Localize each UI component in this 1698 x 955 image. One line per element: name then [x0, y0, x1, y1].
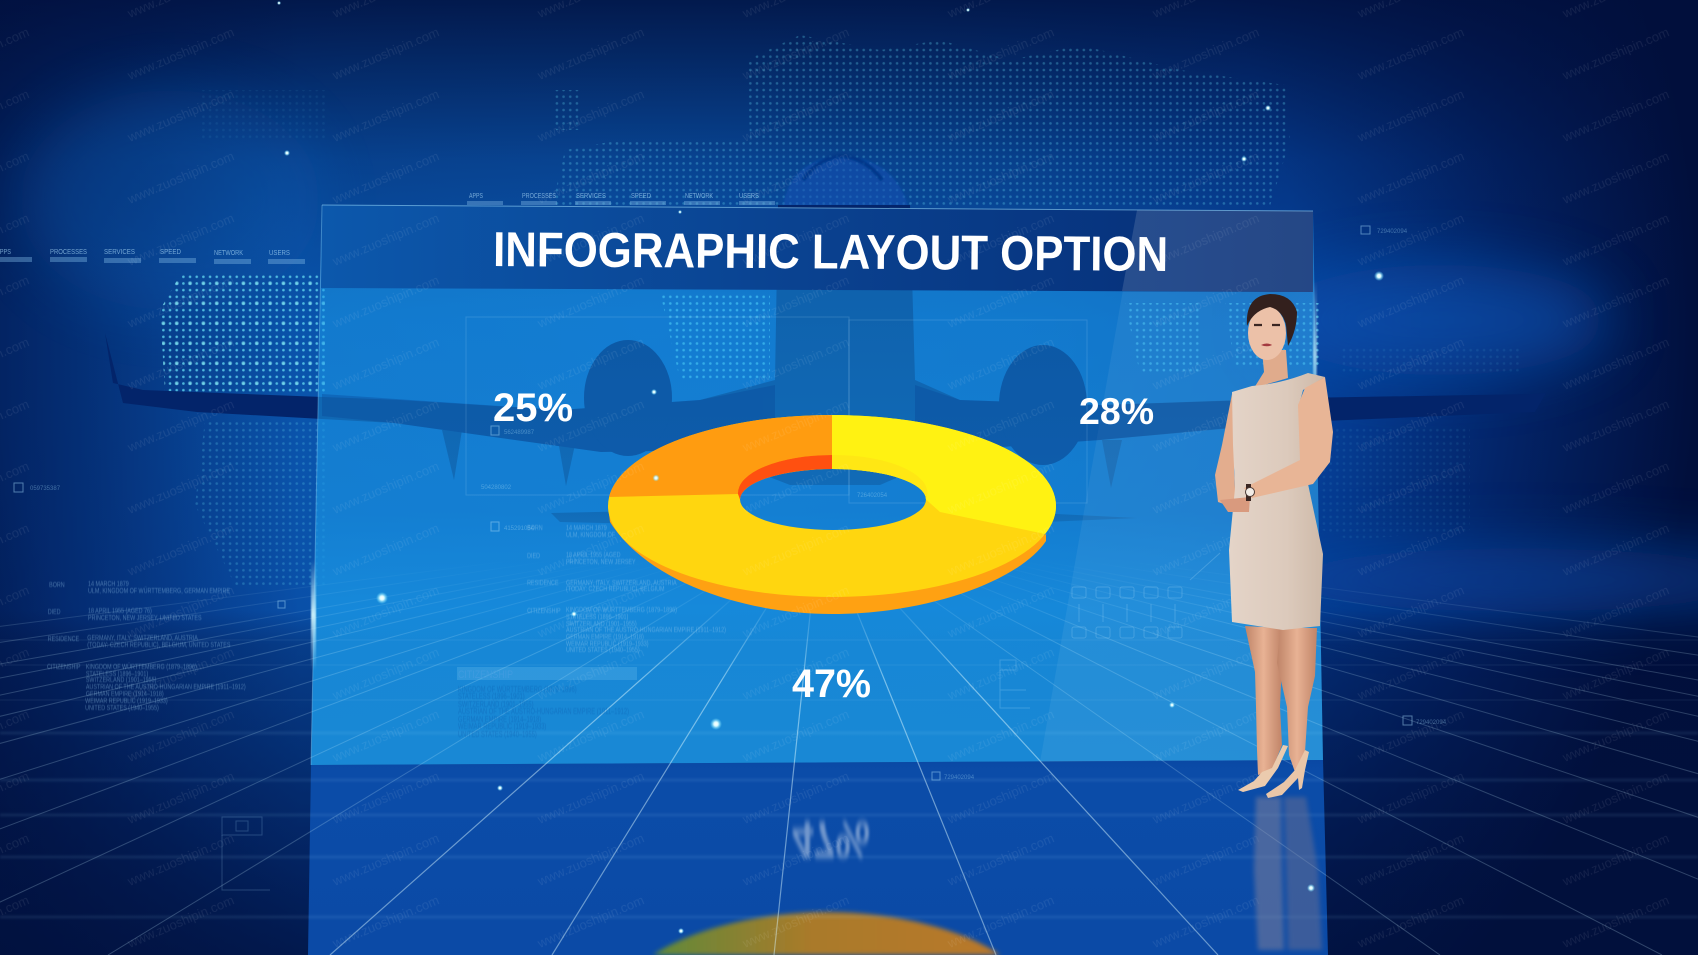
background bio text in panel: SWITZERLAND (1901–1955)	[566, 620, 637, 628]
background bio text left: CITIZENSHIP	[47, 663, 80, 671]
legs	[1245, 626, 1282, 775]
neck and face	[1254, 350, 1288, 388]
background bio text left: 14 MARCH 1879	[88, 580, 129, 588]
background bio text left: AUSTRIAN OF THE AUSTRO-HUNGARIAN EMPIRE (1911–1912)	[86, 683, 246, 691]
perspective grid	[0, 521, 1698, 955]
glowing particles	[277, 1, 1384, 934]
background bio text in panel: WEIMAR REPUBLIC (1919–1933)	[566, 640, 649, 648]
citizenship block in panel: AUSTRIAN OF THE AUSTRO-HUNGARIAN EMPIRE (1911–1912)	[458, 708, 629, 716]
small id markers: 729402094	[1377, 229, 1408, 235]
citizenship block in panel: STATELESS (1896–1901)	[458, 693, 525, 701]
panel edge glow	[311, 205, 1317, 765]
background bio text left: WEIMAR REPUBLIC (1919–1933)	[85, 697, 168, 705]
top background tabs: NETWORK	[214, 248, 243, 257]
network schematic	[1072, 553, 1220, 638]
panel sheen	[1040, 210, 1323, 762]
slice: 28 percent	[832, 415, 1056, 534]
background bio text in panel: 14 MARCH 1879	[566, 524, 607, 532]
upper background tabs	[467, 191, 775, 205]
panel blueprint frames	[466, 317, 1087, 503]
label: 25 percent: 25%	[493, 386, 573, 430]
bottom left schematic	[222, 817, 270, 890]
top background tabs: SERVICES	[104, 247, 135, 256]
reflected 47 percent: 47%	[792, 811, 870, 868]
donut side wall	[608, 506, 1046, 614]
small id markers: 729402094	[1416, 720, 1447, 726]
top background tabs: PROCESSES	[50, 247, 87, 256]
inner wall right	[832, 455, 927, 500]
main translucent panel	[311, 205, 1323, 765]
upper background tabs: NETWORK	[685, 191, 713, 200]
floor reflection of panel	[308, 760, 1328, 955]
background bio text left: BORN	[49, 581, 65, 589]
background bio text left: 18 APRIL 1955 (AGED 76)	[88, 607, 152, 615]
hands	[1220, 497, 1250, 512]
background bio text in panel: AUSTRIAN OF THE AUSTRO-HUNGARIAN EMPIRE (1911–1912)	[566, 626, 726, 634]
inner wall left	[738, 455, 832, 500]
far arm	[1215, 394, 1250, 512]
citizenship block in panel: GERMAN EMPIRE (1914–1918)	[458, 716, 541, 724]
upper background tabs: PROCESSES	[522, 191, 556, 200]
background bio text left: GERMAN EMPIRE (1914–1918)	[86, 690, 164, 698]
form schematic	[1000, 660, 1030, 708]
background bio text in panel: ULM, KINGDOM OF	[566, 531, 615, 539]
background bio text left: KINGDOM OF WÜRTTEMBERG (1879–1896)	[86, 662, 197, 671]
background bio text in panel: KINGDOM OF WÜRTTEMBERG (1879–1896)	[566, 605, 677, 614]
top background tabs: SPEED	[160, 247, 181, 256]
citizenship block in panel: KINGDOM OF WÜRTTEMBERG (1879–1896)	[458, 685, 577, 694]
small id markers: 729402094	[944, 775, 975, 781]
donut chart	[608, 415, 1056, 614]
small id markers: 726402054	[857, 493, 888, 499]
watch	[1246, 484, 1254, 501]
small id markers: 562489987	[504, 430, 535, 436]
airplane tail	[783, 155, 908, 206]
top background tabs	[0, 247, 305, 264]
citizenship block in panel: UNITED STATES (1940–1955)	[458, 731, 537, 739]
upper background tabs: APPS	[469, 191, 483, 200]
slice: 25 percent	[609, 415, 832, 497]
background bio text in panel	[527, 524, 726, 654]
background bio text in panel: DIED	[527, 552, 540, 560]
upper background tabs: SPEED	[631, 191, 651, 200]
background bio text in panel: UNITED STATES (1940–1955)	[566, 646, 640, 654]
small id markers: 504280802	[481, 485, 512, 491]
airplane silhouette	[105, 205, 1546, 525]
near arm	[1244, 377, 1333, 498]
background bio text left: PRINCETON, NEW JERSEY, UNITED STATES	[88, 614, 202, 622]
background bio text in panel: GERMANY, ITALY, SWITZERLAND, AUSTRIA	[566, 579, 677, 587]
background bio text in panel: 18 APRIL 1955 (AGED	[566, 551, 621, 559]
upper background tabs: SERVICES	[576, 191, 606, 200]
presenter	[1215, 294, 1333, 798]
background bio text left: DIED	[48, 608, 61, 616]
hair	[1247, 294, 1297, 346]
presenter reflection	[1254, 797, 1322, 950]
background bio text left: UNITED STATES (1940–1955)	[85, 704, 159, 712]
small id markers: 415291054	[504, 526, 535, 532]
upper background tabs: USERS	[739, 191, 759, 200]
world map dots	[160, 35, 1520, 585]
small id markers	[14, 226, 1447, 781]
header band	[321, 205, 1313, 292]
citizenship block in panel: SWITZERLAND (1901–1955)	[458, 701, 534, 709]
background bio text left: STATELESS (1896–1901)	[86, 670, 148, 678]
background bio text left: ULM, KINGDOM OF WÜRTTEMBERG, GERMAN EMPIRE	[88, 586, 231, 595]
background bio text left	[47, 580, 246, 712]
top background tabs: USERS	[269, 248, 290, 257]
background bio text in panel: PRINCETON, NEW JERSEY	[566, 558, 636, 566]
citizenship block in panel: WEIMAR REPUBLIC (1919–1933)	[458, 723, 546, 731]
background bio text left: SWITZERLAND (1901–1955)	[86, 676, 156, 684]
background bio text left: (TODAY: CZECH REPUBLIC), BELGIUM, UNITED STATES	[87, 641, 231, 649]
shoes	[1238, 745, 1288, 792]
label: 28 percent: 28%	[1079, 390, 1154, 432]
background bio text in panel: (TODAY: CZECH REPUBLIC), BELGIUM	[566, 585, 665, 593]
background bio text in panel: GERMAN EMPIRE (1914–1918)	[566, 633, 644, 641]
background bio text left: RESIDENCE	[48, 635, 80, 643]
background bio text in panel: RESIDENCE	[527, 579, 559, 587]
facial features	[1254, 325, 1280, 346]
label: 47 percent: 47%	[792, 662, 871, 706]
citizenship block in panel	[457, 667, 637, 739]
dress	[1229, 373, 1325, 630]
background bio text in panel: CITIZENSHIP	[527, 607, 561, 615]
background bio text left: GERMANY, ITALY, SWITZERLAND, AUSTRIA	[87, 634, 198, 642]
citizenship block in panel: CITIZENSHIP	[458, 669, 513, 681]
background bio text in panel: BORN	[527, 524, 543, 532]
small id markers: 059735387	[30, 486, 61, 492]
title: INFOGRAPHIC LAYOUT OPTION	[493, 223, 1168, 282]
slice: 47 percent	[608, 415, 1056, 597]
background bio text in panel: STATELESS (1896–1901)	[566, 613, 628, 621]
airplane wings and engines seen through panel	[322, 340, 1313, 465]
